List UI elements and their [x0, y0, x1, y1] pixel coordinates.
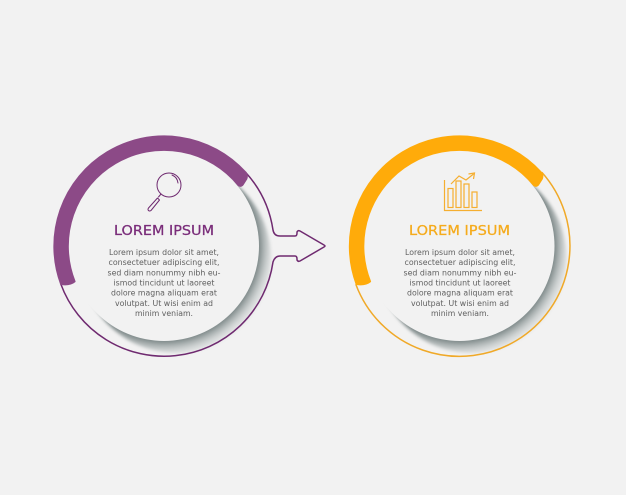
thick purple arc: [54, 136, 247, 285]
text block: left: minim veniam.: [135, 309, 193, 318]
text block: right: [404, 248, 517, 318]
text block: left: volutpat. Ut wisi enim ad: [115, 299, 213, 308]
thin orange ring: [356, 172, 570, 356]
text block: right: volutpat. Ut wisi enim ad: [411, 299, 509, 308]
icon: magnifying glass: [148, 173, 181, 211]
text block: right: Lorem ipsum dolor sit amet,: [405, 248, 515, 257]
thick orange arc: [350, 136, 543, 285]
text block: right: minim veniam.: [431, 309, 489, 318]
panel: left step: [54, 136, 325, 356]
text block: left: dolore magna aliquam erat: [111, 289, 217, 298]
panel: right step: [350, 136, 570, 356]
text block: right: consectetuer adipiscing elit,: [404, 258, 516, 267]
text block: left: [108, 248, 221, 318]
text block: left: Lorem ipsum dolor sit amet,: [109, 248, 219, 257]
text block: left: ismod tincidunt ut laoreet: [114, 278, 215, 288]
heading: left: LOREM IPSUM: [114, 224, 214, 239]
shadow under right disc: [376, 163, 566, 353]
arrow outline ring: [61, 172, 325, 356]
text block: right: ismod tincidunt ut laoreet: [410, 278, 511, 288]
text block: right: dolore magna aliquam erat: [407, 289, 513, 298]
left disc: [69, 151, 259, 341]
right disc: [364, 151, 554, 341]
text block: left: consectetuer adipiscing elit,: [108, 258, 220, 267]
icon: bar chart with arrow: [444, 173, 482, 210]
text block: right: sed diam nonummy nibh eu-: [404, 268, 517, 277]
shadow under left disc: [81, 163, 271, 353]
text block: left: sed diam nonummy nibh eu-: [108, 268, 221, 277]
heading: right: LOREM IPSUM: [409, 224, 510, 239]
